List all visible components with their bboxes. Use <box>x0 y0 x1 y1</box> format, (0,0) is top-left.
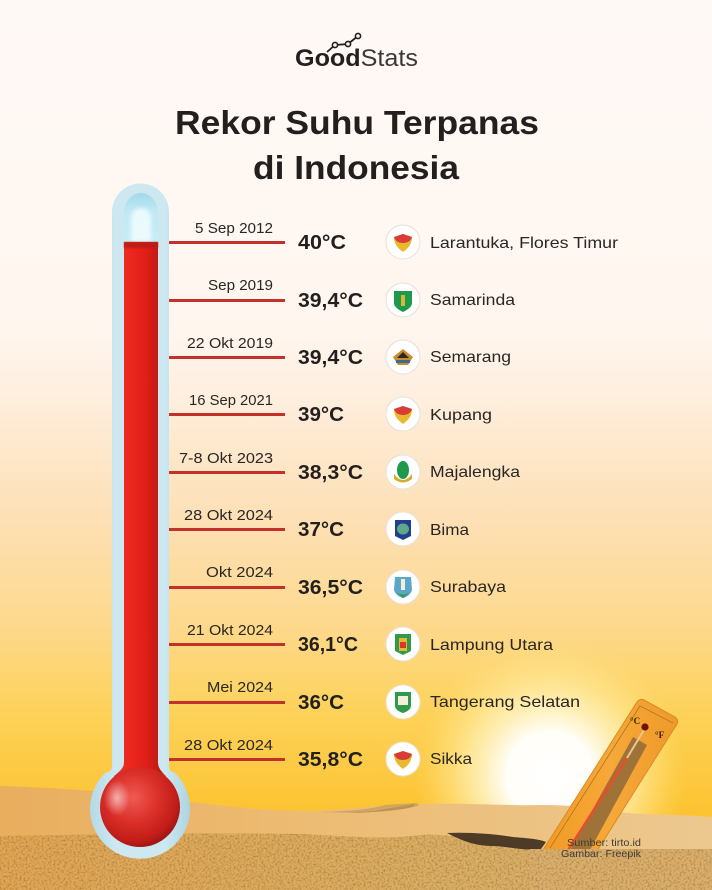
row 8: 36,1°C <box>298 634 358 656</box>
row 8: Lampung Utara <box>430 637 553 654</box>
row 9: Tangerang Selatan <box>430 694 580 711</box>
red bulb <box>100 767 180 847</box>
row 10: Sikka <box>430 751 472 768</box>
column top shadow <box>124 242 158 248</box>
row 1: 5 Sep 2012 <box>195 221 273 237</box>
row 7: Surabaya <box>430 579 506 596</box>
title <box>175 104 539 186</box>
far dunes <box>0 786 712 890</box>
row 8: 21 Okt 2024 <box>187 623 273 639</box>
row 4: 39°C <box>298 404 344 426</box>
row 1: Larantuka, Flores Timur <box>430 235 619 252</box>
thermometer capillary <box>568 758 627 850</box>
row 3 <box>169 336 511 374</box>
row 6: 28 Okt 2024 <box>184 508 273 524</box>
row 5: 7-8 Okt 2023 <box>179 451 273 467</box>
logo wordmark: GoodStats <box>295 45 418 72</box>
row 9: Mei 2024 <box>207 680 273 696</box>
row 2 <box>169 278 515 317</box>
row 5: 38,3°C <box>298 462 363 484</box>
glass tube and bulb <box>90 184 190 859</box>
row 2: 39,4°C <box>298 290 363 312</box>
row 5: Majalengka <box>430 464 520 481</box>
row 5 <box>169 451 520 489</box>
bulb shine <box>104 780 130 816</box>
scale unit labels: °F <box>655 730 665 740</box>
small wooden thermometer photo <box>543 699 678 862</box>
source credit <box>561 837 642 860</box>
glass highlight <box>131 208 151 242</box>
row 4 <box>169 393 492 431</box>
row 8 <box>169 623 553 661</box>
logo: GoodStats <box>295 33 418 72</box>
red column <box>114 242 166 800</box>
row 6: Bima <box>430 522 469 539</box>
foreground dune <box>0 833 712 890</box>
sun glow <box>415 640 685 890</box>
far ridge shadow <box>350 804 415 813</box>
row 1 <box>169 221 619 259</box>
row 3: 39,4°C <box>298 347 363 369</box>
row 3: Semarang <box>430 349 511 366</box>
scale unit labels: °C <box>630 716 640 726</box>
record rows <box>169 221 619 776</box>
row 3: 22 Okt 2019 <box>187 336 273 352</box>
title: di Indonesia <box>253 149 460 186</box>
thermometer scale <box>570 737 647 850</box>
source credit: Gambar: Freepik <box>561 848 642 860</box>
row 2: Sep 2019 <box>208 278 273 294</box>
dark shaded sand patch <box>447 833 546 850</box>
row 7: Okt 2024 <box>206 565 273 581</box>
foreground sand <box>530 849 712 890</box>
row 10: 35,8°C <box>298 749 363 771</box>
row 7: 36,5°C <box>298 577 363 599</box>
scale unit labels <box>630 716 665 740</box>
thermometer reservoir <box>641 723 649 731</box>
desert sand <box>0 786 712 890</box>
row 1: 40°C <box>298 232 346 254</box>
title: Rekor Suhu Terpanas <box>175 104 539 141</box>
logo trend line <box>327 33 361 52</box>
row 2: Samarinda <box>430 292 515 309</box>
row 9: 36°C <box>298 692 344 714</box>
row 10: 28 Okt 2024 <box>184 738 273 754</box>
big thermometer <box>90 184 190 859</box>
row 10 <box>169 738 472 776</box>
row 7 <box>169 565 506 604</box>
source credit: Sumber: tirto.id <box>567 837 641 849</box>
sand grain texture <box>0 833 530 890</box>
row 6: 37°C <box>298 519 344 541</box>
row 6 <box>169 508 469 546</box>
row 4: Kupang <box>430 407 492 424</box>
row 9 <box>169 680 580 719</box>
inner glass <box>124 193 158 245</box>
row 4: 16 Sep 2021 <box>189 393 273 409</box>
